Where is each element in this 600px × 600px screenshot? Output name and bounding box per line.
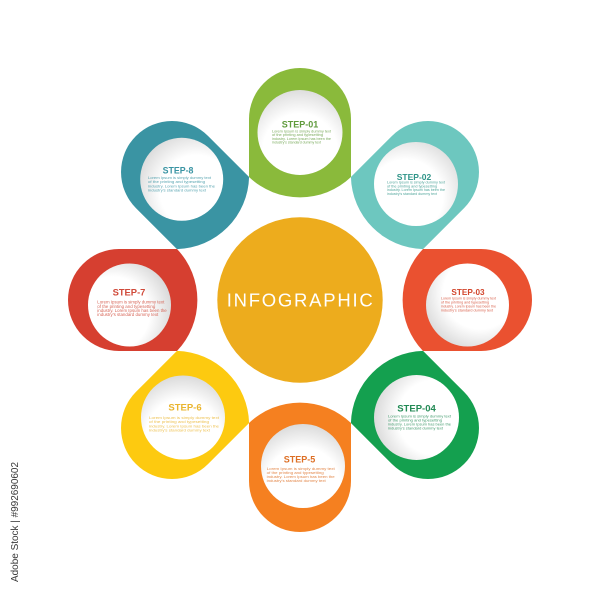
step 06 text: industry. Lorem Ipsum has been the [149,423,220,428]
panel: step 08: STEP-8 [163,165,193,175]
panel: step 03 [403,249,532,351]
step 02 text: Lorem Ipsum is simply dummy text [387,180,445,184]
step 02 text: of the printing and typesetting [387,184,437,188]
panel: step 07: STEP-7 [113,286,145,298]
panel: step 06 [100,337,263,500]
step 07 text [97,300,167,317]
panel: step 01 [249,68,351,197]
step 02 text: industry's standard dummy text [387,192,437,196]
panel: step 08 [100,100,263,263]
step 06 text: of the printing and typesetting [149,419,209,424]
step 05 text: Lorem Ipsum is simply dummy text [267,467,336,471]
step 04 text: industry. Lorem Ipsum has been the [388,422,452,426]
step 03 text: of the printing and typesetting [441,300,489,304]
step 07 text: industry's standard dummy text [97,312,159,317]
panel: step 05 [249,403,351,532]
step 02 text: industry. Lorem Ipsum has been the [387,188,445,192]
step 06 text: Lorem Ipsum is simply dummy text [149,415,220,420]
step 05 text: industry. Lorem Ipsum has been the [267,475,335,479]
step 01 text: industry. Lorem Ipsum has been the [272,137,331,141]
step 03 text: industry. Lorem Ipsum has been the [441,304,496,308]
step 07 text: industry. Lorem Ipsum has been the [97,308,167,313]
stock id caption: Adobe Stock | #992690602 [9,462,21,582]
step 08 text: Lorem Ipsum is simply dummy text [148,175,212,180]
step 05 text [267,467,336,483]
step 01 text: industry's standard dummy text [272,141,321,145]
step 07 text: Lorem Ipsum is simply dummy text [97,300,165,304]
step 01 text: Lorem Ipsum is simply dummy text [272,130,331,134]
panel: step 03: STEP-03 [451,288,485,297]
step 08 text [148,175,215,193]
step 08 text: industry. Lorem Ipsum has been the [148,183,215,188]
panel: step 05: STEP-5 [284,454,315,464]
panel: step 04 [337,337,500,500]
step 05 text: industry's standard dummy text [267,479,327,483]
panel: step 02 [337,100,500,263]
step 01 text: of the printing and typesetting [272,133,323,137]
step 08 text: industry's standard dummy text [148,188,207,193]
panel: step 02: STEP-02 [397,172,432,182]
step 05 text: of the printing and typesetting [267,471,324,475]
step 04 text: Lorem Ipsum is simply dummy text [388,414,452,418]
step 01 text [272,130,331,145]
step 03 text [441,296,496,312]
panel: step 07 [68,249,197,351]
step 07 text: of the printing and typesetting [97,304,156,309]
center title: INFOGRAPHIC [227,290,373,311]
center circle [217,217,383,383]
step 03 text: industry's standard dummy text [441,308,493,312]
step 04 text: of the printing and typesetting [388,418,442,422]
step 03 text: Lorem Ipsum is simply dummy text [441,296,496,300]
step 04 text: industry's standard dummy text [388,426,444,430]
panel: step 01: STEP-01 [282,120,318,130]
step 06 text [149,415,220,432]
panel: step 04: STEP-04 [397,404,436,414]
step 06 text: industry's standard dummy text [149,428,211,432]
step 04 text [388,414,452,430]
panel: step 06: STEP-6 [168,402,202,414]
step 08 text: of the printing and typesetting [148,179,205,184]
step 02 text [387,180,445,196]
